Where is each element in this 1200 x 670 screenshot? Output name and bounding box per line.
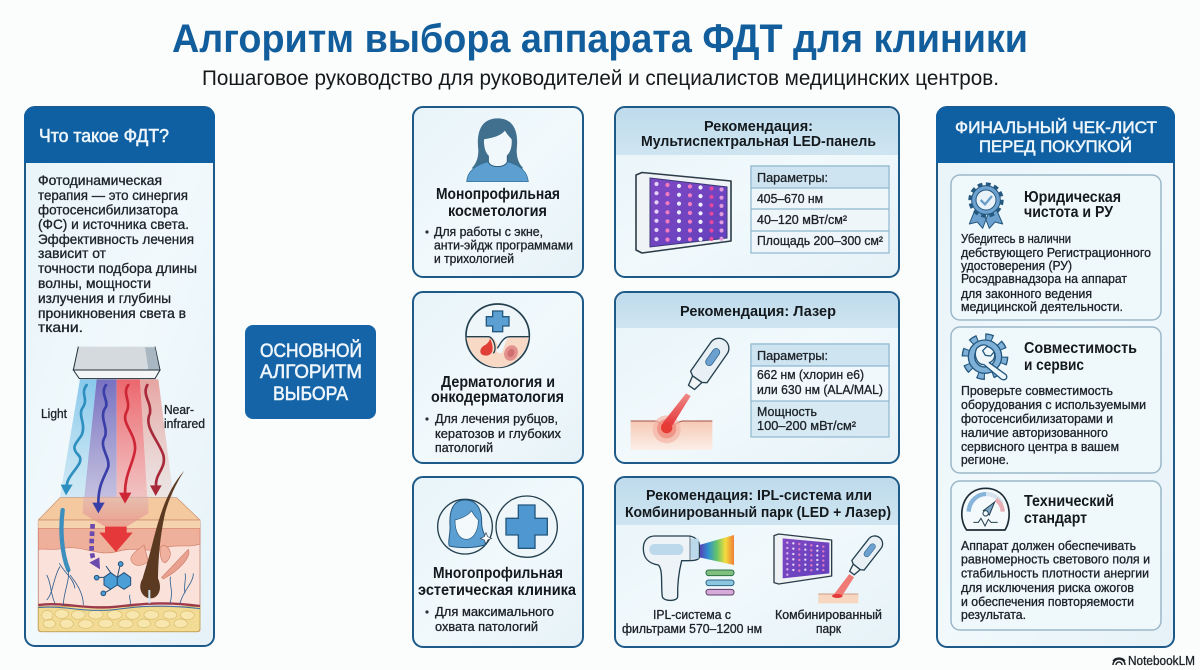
callout: main algorithm: ОСНОВНОЙ bbox=[260, 340, 362, 362]
caption: combined park: парк bbox=[816, 621, 841, 636]
panel header bbox=[936, 107, 1175, 163]
description text: проникновения света в bbox=[38, 305, 186, 321]
heading: эстетическая клиника bbox=[418, 582, 576, 599]
icon: LED panel bbox=[636, 172, 731, 253]
caption: IPL system bbox=[622, 607, 762, 636]
panel header: ПЕРЕД ПОКУПКОЙ bbox=[979, 137, 1132, 156]
heading: Монопрофильная bbox=[436, 186, 560, 203]
heading: Технический bbox=[1024, 493, 1114, 510]
callout: main algorithm: АЛГОРИТМ bbox=[260, 362, 362, 383]
caption: IPL system: фильтрами 570–1200 нм bbox=[622, 621, 762, 636]
description text: Фотодинамическая bbox=[38, 172, 162, 188]
callout: main algorithm bbox=[245, 325, 376, 419]
body text: сервисного центра в вашем bbox=[961, 439, 1119, 454]
label: near-infrared: infrared bbox=[164, 416, 205, 431]
body text: регионе. bbox=[961, 452, 1009, 467]
body text: наличие авторизованного bbox=[961, 425, 1108, 440]
panel header: Что такое ФДТ? bbox=[39, 126, 169, 146]
description text: точности подбора длины bbox=[38, 260, 197, 276]
body text bbox=[961, 383, 1146, 467]
bullet text: Для работы с экне, bbox=[434, 224, 543, 239]
heading bbox=[436, 186, 560, 220]
title: Алгоритм выбора аппарата ФДТ для клиники bbox=[172, 17, 1028, 61]
heading: стандарт bbox=[1024, 510, 1087, 527]
caption: combined park bbox=[775, 607, 882, 636]
light beams bbox=[60, 379, 173, 527]
bullet text bbox=[425, 604, 554, 634]
body text: фотосенсибилизаторами и bbox=[961, 411, 1113, 426]
card: LED panel recommendation bbox=[615, 107, 899, 277]
parameters table: 40–120 мВт/см² bbox=[757, 212, 848, 227]
description text bbox=[38, 172, 197, 335]
icon: certified badge bbox=[969, 185, 1003, 228]
skin cross-section bbox=[38, 498, 200, 632]
body text: медицинской деятельности. bbox=[961, 299, 1123, 314]
checklist item: legal bbox=[951, 175, 1161, 320]
parameters table: Параметры: bbox=[757, 170, 828, 185]
parameters table: Параметры: bbox=[757, 348, 828, 363]
description text: ткани. bbox=[38, 319, 83, 335]
dashed absorption arrow bbox=[89, 524, 100, 569]
description text: (ФС) и источника света. bbox=[38, 216, 189, 232]
body text: и обеспечения повторяемости bbox=[961, 594, 1134, 609]
bullet text: патологий bbox=[435, 440, 493, 455]
body text: Проверьте совместимость bbox=[961, 383, 1113, 398]
light device bbox=[73, 347, 160, 379]
big red arrow bbox=[83, 497, 148, 552]
icon: woman bbox=[467, 118, 528, 182]
card: multiprofile aesthetic clinic bbox=[413, 477, 583, 647]
card header: Мультиспектральная LED-панель bbox=[641, 133, 876, 150]
bullet text: анти-эйдж программами bbox=[434, 238, 573, 252]
panel: what is PDT bbox=[24, 107, 215, 646]
bullet text: Для максимального bbox=[435, 604, 554, 619]
icon: gear and wrench bbox=[966, 338, 1007, 380]
caption: IPL system: IPL-система с bbox=[653, 607, 731, 622]
body text: результата. bbox=[961, 607, 1026, 622]
heading: и сервис bbox=[1024, 357, 1084, 374]
heading: чистота и РУ bbox=[1024, 204, 1113, 221]
arrowheads bbox=[61, 485, 162, 513]
label: light: Light bbox=[41, 406, 67, 421]
heading: Совместимость bbox=[1024, 340, 1137, 357]
body text: Аппарат должен обеспечивать bbox=[961, 538, 1136, 553]
parameters table: 100–200 мВт/см² bbox=[757, 418, 857, 433]
description text: Эффективность лечения bbox=[38, 231, 194, 247]
wavy light arrows bbox=[67, 385, 164, 503]
body text: равномерность светового поля и bbox=[961, 552, 1150, 566]
card header bbox=[616, 293, 898, 328]
callout: main algorithm: ВЫБОРА bbox=[273, 384, 348, 405]
caption: combined park: Комбинированный bbox=[775, 607, 882, 622]
panel header bbox=[24, 107, 215, 163]
card header: Рекомендация: bbox=[704, 118, 813, 135]
parameters table bbox=[751, 344, 889, 437]
watermark: NotebookLM: NotebookLM bbox=[1128, 653, 1195, 668]
card header: Комбинированный парк (LED + Лазер) bbox=[625, 504, 891, 521]
heading bbox=[1024, 340, 1137, 374]
parameters table: или 630 нм (ALA/MAL) bbox=[757, 382, 883, 397]
body text: Убедитесь в налични bbox=[961, 231, 1071, 246]
checklist item: compatibility bbox=[951, 327, 1161, 473]
body text: оборудования с используемыми bbox=[961, 397, 1146, 412]
heading bbox=[1024, 493, 1114, 527]
subtitle: Пошаговое руководство для руководителей и специалистов медицинских центров. bbox=[202, 66, 999, 90]
card header: Рекомендация: Лазер bbox=[680, 303, 836, 320]
body text: для исключения риска ожогов bbox=[961, 580, 1134, 595]
heading: косметология bbox=[448, 203, 547, 220]
card: monoprofile cosmetology bbox=[413, 107, 583, 277]
panel header: ФИНАЛЬНЫЙ ЧЕК-ЛИСТ bbox=[955, 118, 1157, 137]
parameters table: 405–670 нм bbox=[757, 191, 823, 206]
heading: Многопрофильная bbox=[433, 565, 563, 582]
bullet text: охвата патологий bbox=[435, 619, 538, 634]
description text: волны, мощности bbox=[38, 275, 151, 291]
body text: Росэдравнадзора на аппарат bbox=[961, 271, 1127, 286]
parameters table: Мощность bbox=[757, 404, 817, 419]
checklist item: technical standard bbox=[951, 481, 1161, 630]
icon: laser handpiece on skin bbox=[631, 334, 733, 450]
parameters table bbox=[751, 166, 889, 253]
illustration: light penetrating skin bbox=[38, 347, 200, 632]
parameters table: Площадь 200–300 см² bbox=[757, 233, 884, 248]
body text: для законного ведения bbox=[961, 286, 1092, 301]
icon: woman and medical cross bbox=[438, 496, 557, 557]
card: IPL or combined recommendation bbox=[615, 477, 899, 647]
description text: излучения и глубины bbox=[38, 290, 171, 306]
icon: combined LED and laser bbox=[774, 533, 886, 603]
bullet text: Для лечения рубцов, bbox=[435, 411, 558, 426]
body text bbox=[961, 538, 1150, 622]
heading bbox=[431, 374, 564, 406]
heading: Юридическая bbox=[1024, 189, 1121, 206]
label: near-infrared: Near- bbox=[164, 402, 194, 417]
bullet text bbox=[425, 411, 561, 455]
card: dermatology bbox=[413, 292, 583, 463]
icon: gauge bbox=[962, 488, 1009, 530]
body text bbox=[961, 231, 1151, 314]
photosensitizer molecule bbox=[94, 562, 131, 596]
heading bbox=[418, 565, 576, 599]
body text: стабильность плотности анергии bbox=[961, 566, 1149, 580]
description text: зависит от bbox=[38, 245, 107, 261]
description text: фотосенсибилизатора bbox=[38, 202, 178, 218]
heading bbox=[1024, 189, 1121, 221]
bullet text: кератозов и глубоких bbox=[435, 426, 561, 441]
parameters table: 662 нм (хлорин е6) bbox=[757, 367, 864, 382]
body text: удостоверения (РУ) bbox=[961, 258, 1072, 273]
body text: дебствующего Регистрационного bbox=[961, 245, 1151, 260]
card header bbox=[616, 108, 898, 155]
bullet text bbox=[425, 224, 573, 266]
icon: IPL device bbox=[643, 535, 734, 600]
bullet text: и трихологией bbox=[434, 251, 514, 266]
hair follicle bbox=[131, 471, 189, 603]
card header: Рекомендация: IPL-система или bbox=[646, 487, 872, 504]
card: laser recommendation bbox=[615, 292, 899, 463]
heading: Дерматология и bbox=[441, 374, 555, 391]
heading: онкодерматология bbox=[431, 389, 564, 406]
card header bbox=[616, 478, 898, 525]
panel: final checklist bbox=[936, 107, 1175, 647]
label: near-infrared bbox=[164, 402, 205, 431]
icon: skin lesion bbox=[466, 304, 529, 367]
description text: терапия — это синергия bbox=[38, 187, 188, 203]
